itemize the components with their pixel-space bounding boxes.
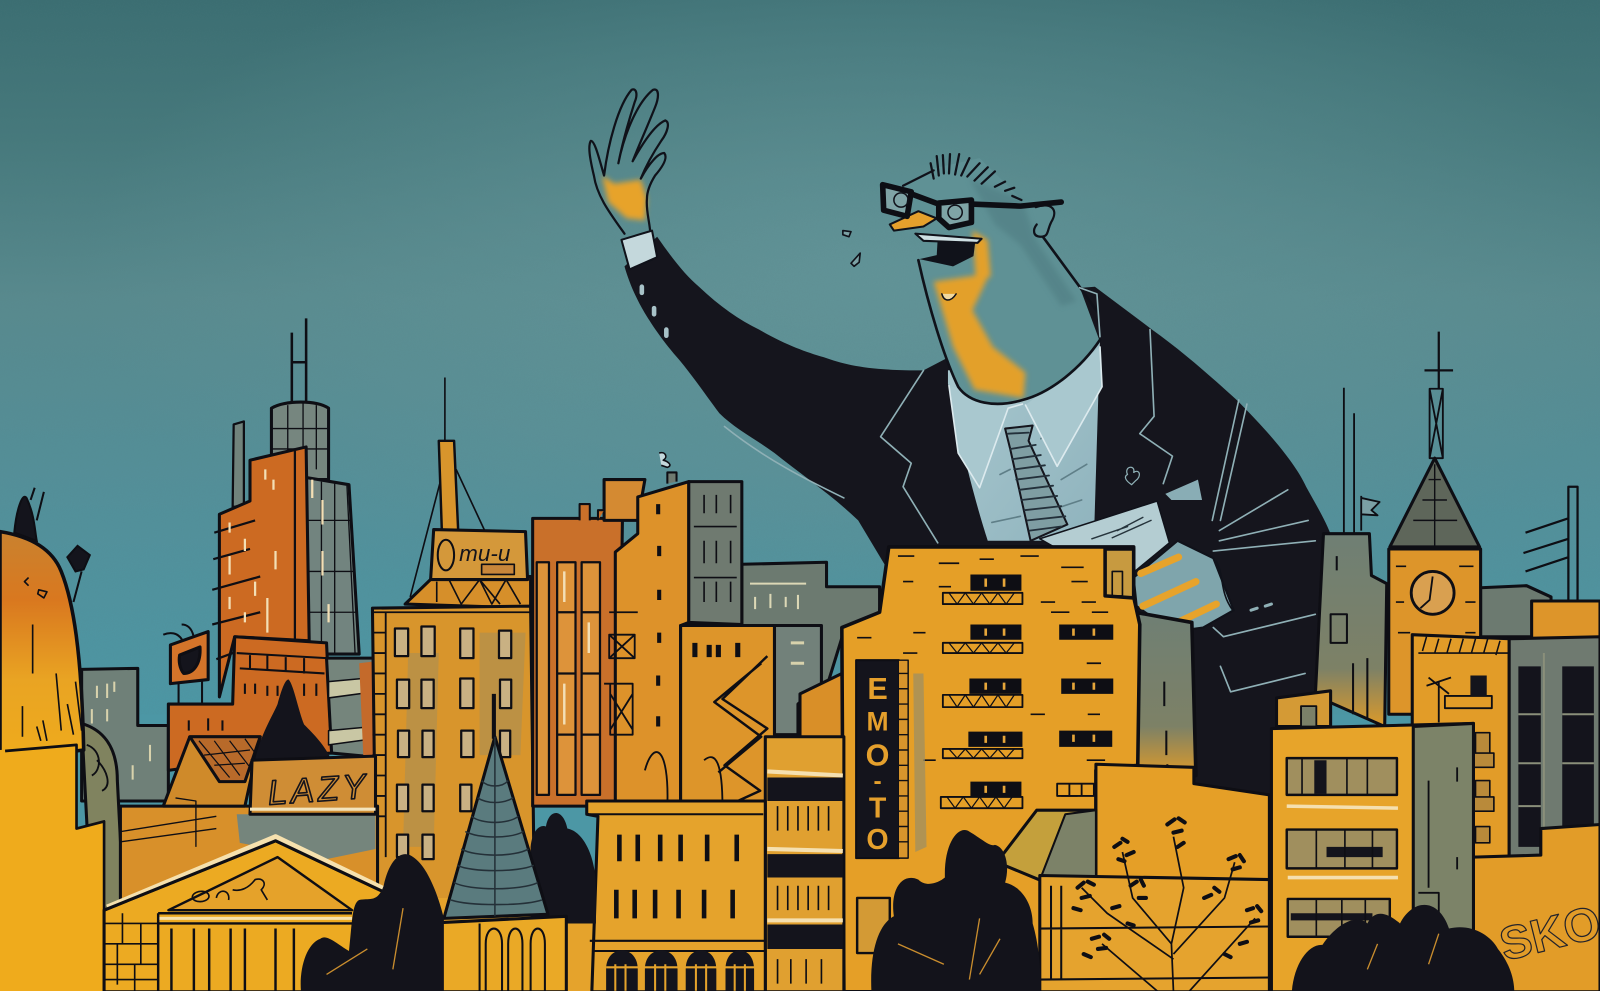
street lamps xyxy=(645,752,722,806)
tall windows xyxy=(537,562,600,795)
side wall details xyxy=(1418,767,1457,949)
window mullions xyxy=(1518,653,1594,829)
vertical sign: EMO-TO: E xyxy=(867,672,888,706)
roof box on right building xyxy=(1277,691,1331,727)
small chimneys xyxy=(580,504,604,520)
far antennas and flag xyxy=(1344,388,1380,533)
man: cuff buttons xyxy=(1251,604,1271,610)
small rooftop trees far left xyxy=(14,488,90,602)
tree behind cone xyxy=(531,813,596,923)
man: jacket lapel lines xyxy=(724,288,1247,543)
man: hair xyxy=(903,154,1021,200)
rooftop box xyxy=(1105,549,1134,598)
skyline: low left cluster xyxy=(120,680,378,913)
far left grey building xyxy=(82,668,168,801)
house arches xyxy=(480,923,545,991)
vertical sign: EMO-TO: O xyxy=(866,824,889,856)
window lights xyxy=(986,579,1094,793)
clock face xyxy=(1411,571,1454,614)
cylinder lines xyxy=(1040,886,1269,980)
foreground left: parking structure and arcaded building xyxy=(104,694,844,991)
dome xyxy=(0,532,84,760)
orange mid-building xyxy=(1412,635,1509,857)
billboard with mouth xyxy=(163,624,208,704)
temple with pediment xyxy=(104,837,386,991)
tower top grey drum xyxy=(271,402,329,480)
small bar window xyxy=(1057,784,1094,796)
tiled roof xyxy=(190,737,260,782)
tower orange main body xyxy=(219,447,309,697)
chimney with smoke xyxy=(659,453,677,484)
aerial and balcony xyxy=(1427,678,1492,722)
giant man xyxy=(589,89,1332,801)
grey chimney tower xyxy=(1315,534,1387,727)
mid-right orange building xyxy=(681,625,774,806)
tower side sliver xyxy=(233,421,244,507)
parking cream stripes xyxy=(767,771,843,920)
parking hatches xyxy=(778,806,829,984)
window slots xyxy=(616,835,737,918)
tall orange building xyxy=(615,482,689,806)
cornice building xyxy=(587,801,765,991)
parking dark bands xyxy=(767,778,843,949)
rooftop box door xyxy=(1112,571,1122,596)
brick side strip and cornice xyxy=(372,612,531,857)
arch bars xyxy=(606,964,754,991)
man: jacket body and raised sleeve xyxy=(624,237,1332,801)
vertical sign: EMO-TO: M xyxy=(867,707,889,737)
roof box door xyxy=(1301,706,1316,727)
pale window marks xyxy=(92,682,150,780)
man: papers under arm xyxy=(1040,480,1202,571)
orange block right of facade xyxy=(1096,764,1269,893)
vertical sign: EMO-TO: O xyxy=(866,738,889,772)
lower wall block xyxy=(0,745,104,991)
right side skyline xyxy=(1271,332,1600,991)
tower lower grey section xyxy=(306,478,359,654)
man: head shading xyxy=(969,179,1077,306)
balconies xyxy=(941,593,1022,808)
grey side of tall building xyxy=(689,482,742,624)
pale marks on grey xyxy=(750,584,806,609)
orange streak xyxy=(359,661,376,757)
cornice line xyxy=(590,813,763,815)
man: neck outline xyxy=(918,237,1100,404)
top orange block far right xyxy=(1532,601,1600,639)
zigzag fire escape xyxy=(714,656,767,806)
tree: dark shrub on dome xyxy=(14,488,44,541)
man: shirt cuff xyxy=(621,231,657,269)
lower left box xyxy=(857,898,890,953)
man: lapel pin xyxy=(1125,467,1139,485)
man: open mouth xyxy=(915,234,982,266)
conical roof xyxy=(444,694,548,918)
telegraph pole and wires xyxy=(120,798,216,847)
grey back building behind fire escape xyxy=(742,562,880,704)
ramp hatch xyxy=(1041,810,1096,878)
man: shirt xyxy=(948,340,1100,541)
billboard: LAZY xyxy=(250,756,376,814)
grey annex xyxy=(774,625,821,735)
center-left window block building xyxy=(372,606,535,918)
man: glasses xyxy=(883,185,1061,228)
vertical sign: EMO-TO: - xyxy=(873,768,882,795)
bottom right orange block with graffiti xyxy=(1473,824,1600,991)
mid-building roof hatch xyxy=(1418,637,1508,655)
tree: small sapling xyxy=(67,546,90,602)
stripes on grey building xyxy=(329,678,373,745)
left grey organic building xyxy=(82,723,124,918)
small side balconies xyxy=(1473,733,1494,843)
dark windows xyxy=(968,574,1113,797)
spit droplets xyxy=(843,231,860,266)
lattice mast xyxy=(1523,487,1578,602)
tree branch highlights xyxy=(327,908,1439,980)
columns xyxy=(158,913,294,991)
skyline: middle buildings xyxy=(372,378,880,918)
brick dashes xyxy=(857,556,1108,796)
grid of windows xyxy=(395,627,511,859)
foreground dark trees xyxy=(301,830,1514,991)
roof box on red-brick xyxy=(604,480,645,520)
dark tree behind sign xyxy=(255,680,332,760)
grey column behind building xyxy=(1135,612,1196,775)
grey shadow beside sign xyxy=(913,673,927,852)
grey right building xyxy=(1509,637,1600,857)
man: shirt wrinkles xyxy=(992,383,1097,522)
low burnt-orange arcade building xyxy=(168,637,332,770)
man: sleeve and pocket lines xyxy=(1213,490,1315,692)
billboard: LAZY: LAZY xyxy=(266,768,370,813)
entablature xyxy=(158,913,352,923)
grey wall under sign xyxy=(237,814,376,859)
tree: right foreground xyxy=(1292,905,1514,991)
man: raised hand xyxy=(589,89,668,234)
right foreground building xyxy=(1271,723,1473,991)
dark tall windows xyxy=(1518,666,1594,847)
rooftop billboard: mu-u xyxy=(459,541,511,566)
lower wall outline xyxy=(5,745,104,991)
window bands xyxy=(1287,758,1398,937)
man: sleeve buttons xyxy=(642,287,666,336)
roof trusses xyxy=(437,580,520,604)
grey striped building xyxy=(327,658,376,757)
man: orange glow on throat xyxy=(934,231,1026,398)
cylindrical building xyxy=(1040,875,1269,991)
grey back block xyxy=(1481,586,1551,637)
man: head and neck xyxy=(888,158,1100,404)
main facade xyxy=(842,547,1140,991)
arcade details xyxy=(189,653,327,731)
man: necktie xyxy=(1005,426,1067,541)
grey tower details xyxy=(1331,556,1367,719)
man: ear xyxy=(1034,205,1054,237)
skyline: far background buildings xyxy=(82,318,376,918)
grey ramp xyxy=(997,810,1096,880)
small windows row xyxy=(695,643,738,657)
red-brick building with tall windows xyxy=(533,518,622,806)
tower antennas xyxy=(292,318,306,412)
large central building xyxy=(842,547,1196,991)
house with tiled roof xyxy=(163,737,260,806)
vertical sign: EMO-TO xyxy=(856,660,908,858)
roof hatch xyxy=(199,739,255,778)
grey side wall xyxy=(1413,723,1473,969)
small orange roof xyxy=(800,673,844,739)
tree: beside temple xyxy=(301,854,444,991)
leafless tree xyxy=(1073,818,1261,991)
brick side xyxy=(104,913,158,991)
grey side window slots xyxy=(694,495,737,602)
base ledge xyxy=(590,941,765,951)
man: lower hand holding papers xyxy=(1134,541,1234,632)
fire escape on tall building xyxy=(604,612,638,735)
annex windows xyxy=(791,643,804,663)
rooftop billboard xyxy=(431,530,528,580)
vertical sign: EMO-TO: T xyxy=(869,792,887,824)
man: chin mark xyxy=(942,294,956,300)
lower central buildings and ramp xyxy=(997,764,1269,991)
dome marks xyxy=(22,578,82,741)
roof pyramid xyxy=(405,577,531,608)
tower brick marks xyxy=(1396,566,1476,633)
cone-roof house base xyxy=(423,916,566,991)
orange low block xyxy=(120,806,378,913)
column slots xyxy=(1164,682,1167,770)
spire and guy wires xyxy=(410,378,485,597)
left organic details xyxy=(87,745,108,791)
tower glazing lines xyxy=(271,403,357,654)
tower window dashes and ledges xyxy=(212,451,295,659)
yellow ground fill between buildings xyxy=(386,898,612,991)
tree: center large xyxy=(871,830,1041,991)
tall building small windows xyxy=(658,504,659,727)
pediment relief xyxy=(192,879,267,902)
arched windows xyxy=(606,950,754,991)
man: shirt collar xyxy=(949,347,1102,488)
man: nose xyxy=(890,211,937,231)
left foreground dome and wall xyxy=(0,532,104,991)
grey wash on facade xyxy=(403,633,526,847)
parking garage xyxy=(765,737,844,991)
clock tower xyxy=(1389,332,1481,714)
